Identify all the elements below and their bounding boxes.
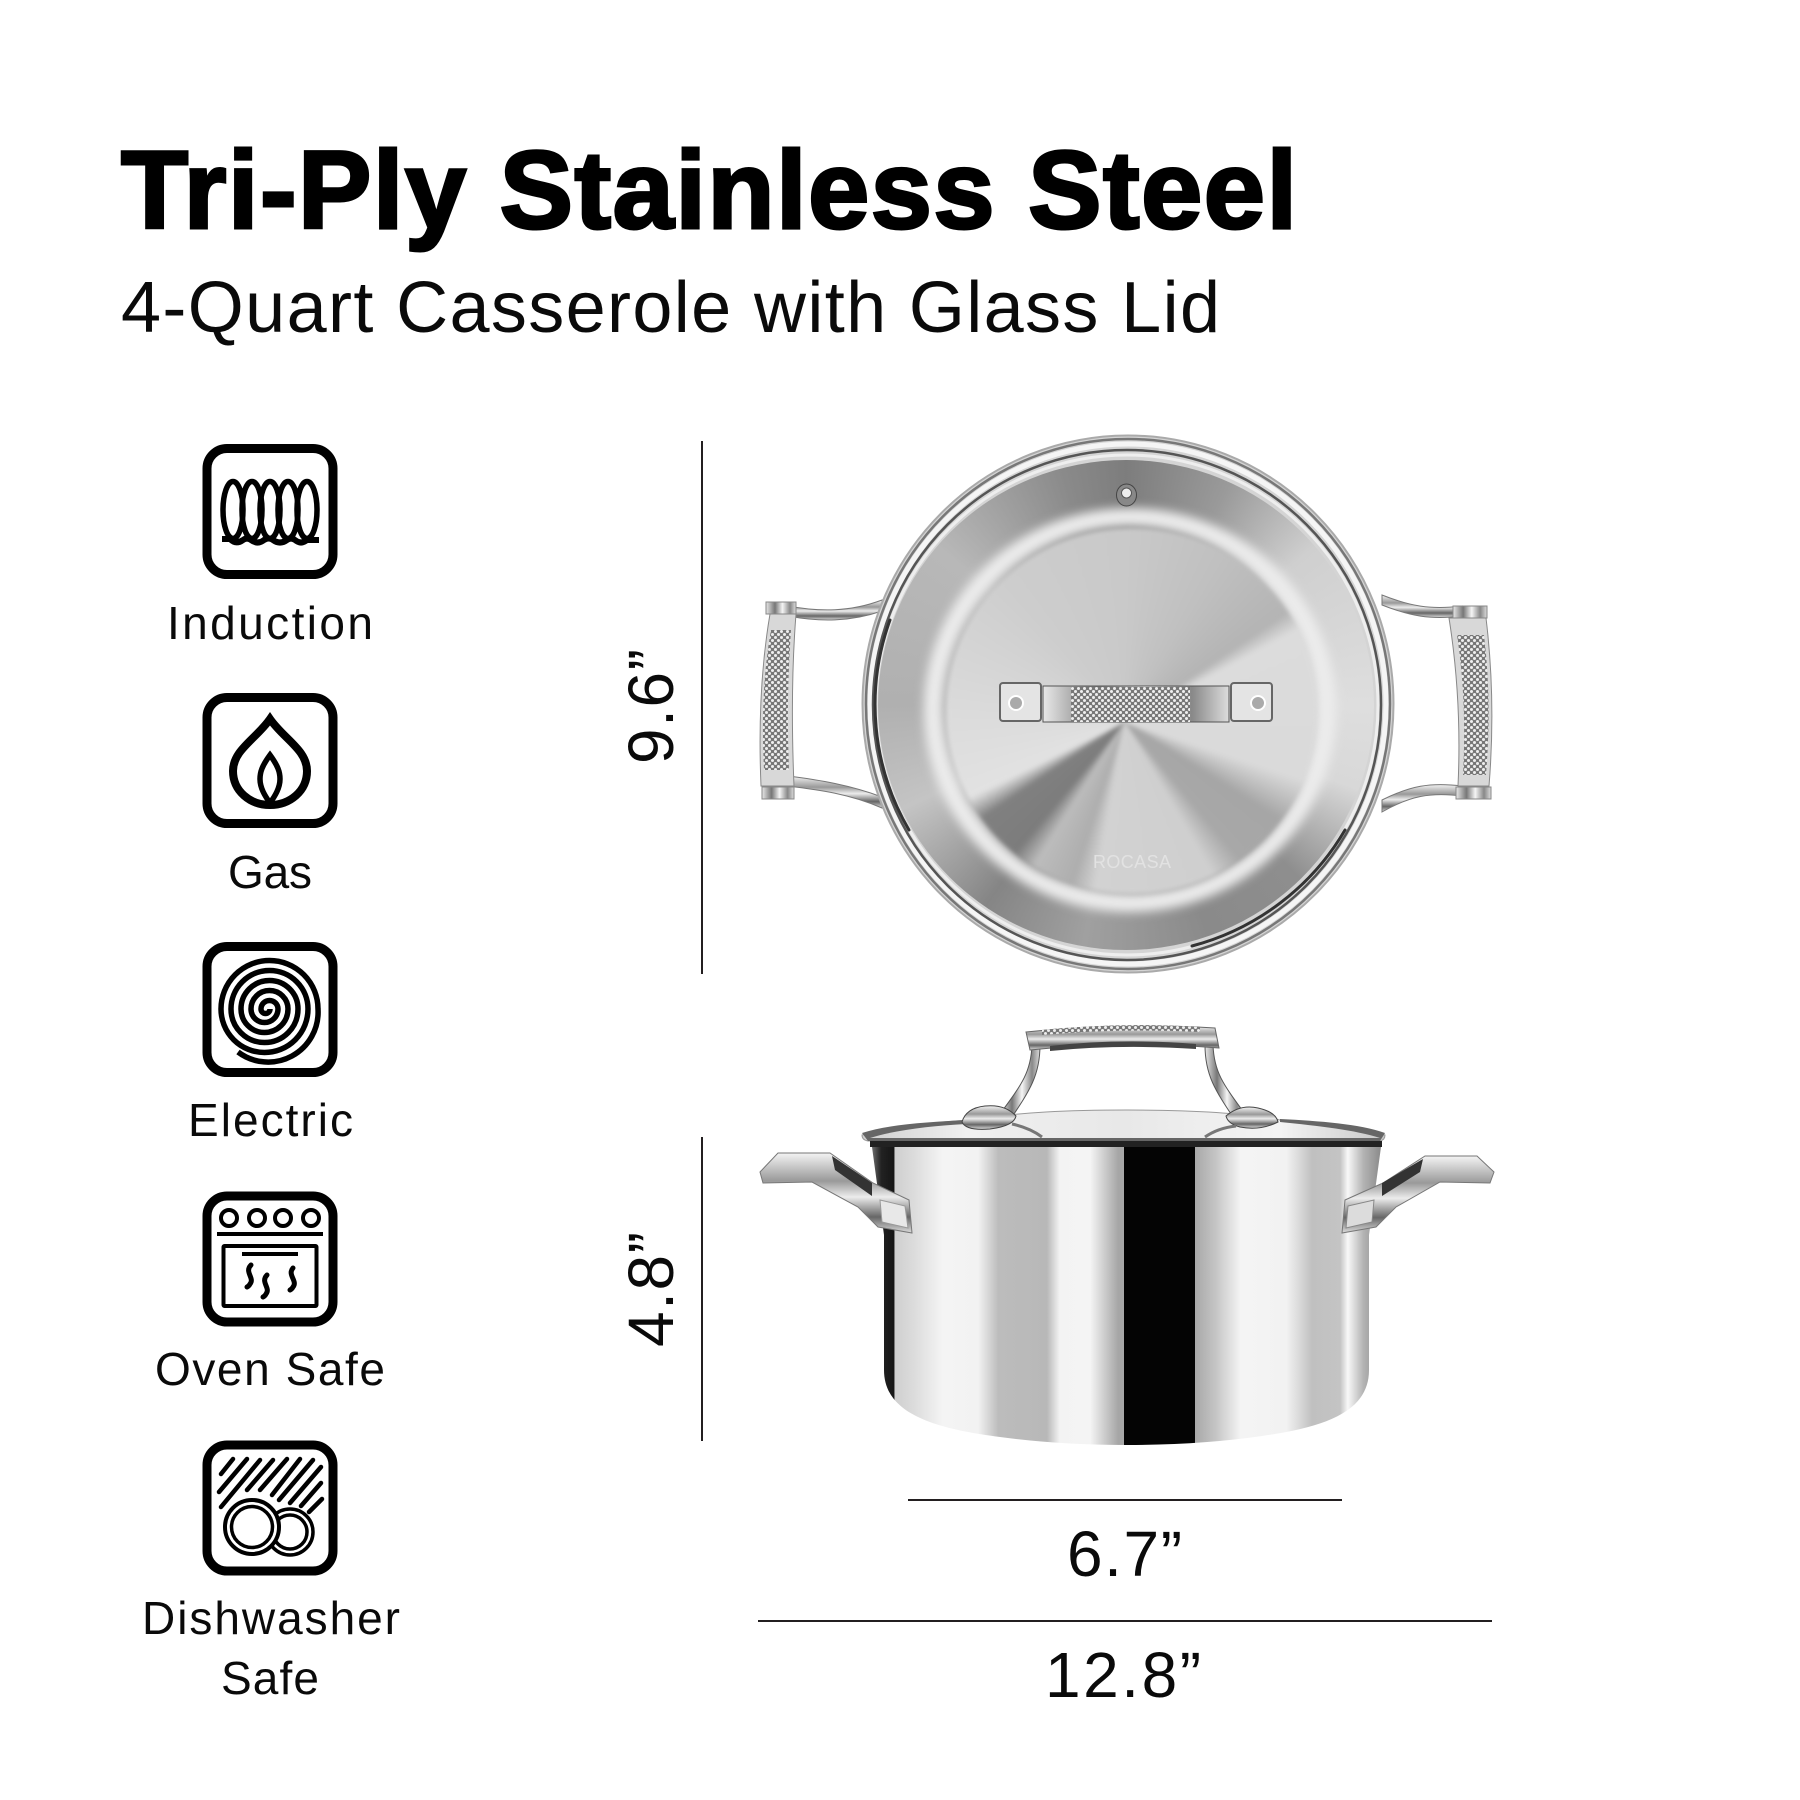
outer rim [862, 436, 1394, 972]
dimension: height 4.8: 4.8” [615, 1232, 687, 1347]
lid knob handle [1000, 1025, 1245, 1120]
label: electric: Electric [188, 1094, 353, 1146]
label: induction: Induction [167, 597, 373, 649]
product: casserole side view [760, 1025, 1494, 1445]
pot body with vertical reflections [872, 1147, 1381, 1445]
lid vent knob [1116, 484, 1136, 506]
icon: electric coil [207, 946, 333, 1072]
dimension: height 9.6: 9.6” [615, 649, 687, 764]
dimension: base width 6.7: 6.7” [1067, 1518, 1182, 1590]
pot rim line [870, 1141, 1382, 1147]
title: Tri-Ply Stainless Steel [121, 129, 1297, 252]
brand mark: ROCASA [1093, 852, 1171, 872]
dark rim reflections [875, 620, 1345, 946]
lid handle [1000, 683, 1272, 722]
panel: cooktop compatibility icons [142, 448, 400, 1704]
lid dome [862, 1110, 1385, 1141]
glass lid bowl wall [870, 452, 1384, 958]
label: dishwasher safe: Dishwasher [142, 1592, 400, 1644]
label: dishwasher safe: Safe [221, 1652, 319, 1704]
dimension: overall width 12.8: 12.8” [1045, 1639, 1201, 1711]
highlight ring [933, 517, 1327, 903]
icon: induction [207, 448, 333, 574]
right side handle [1382, 595, 1492, 812]
subtitle: 4-Quart Casserole with Glass Lid [121, 268, 1220, 348]
icon: oven [207, 1196, 333, 1322]
side handle left [760, 1153, 912, 1233]
base disc [940, 522, 1324, 900]
label: gas: Gas [228, 846, 312, 898]
left side handle [760, 600, 882, 808]
icon: dishwasher [207, 1445, 333, 1571]
side handle right [1342, 1156, 1494, 1233]
icon: gas flame [207, 698, 333, 824]
lid rim [862, 1119, 1385, 1141]
product: casserole top view [760, 436, 1492, 972]
label: oven safe: Oven Safe [155, 1343, 385, 1395]
lid bracket feet [962, 1106, 1278, 1137]
